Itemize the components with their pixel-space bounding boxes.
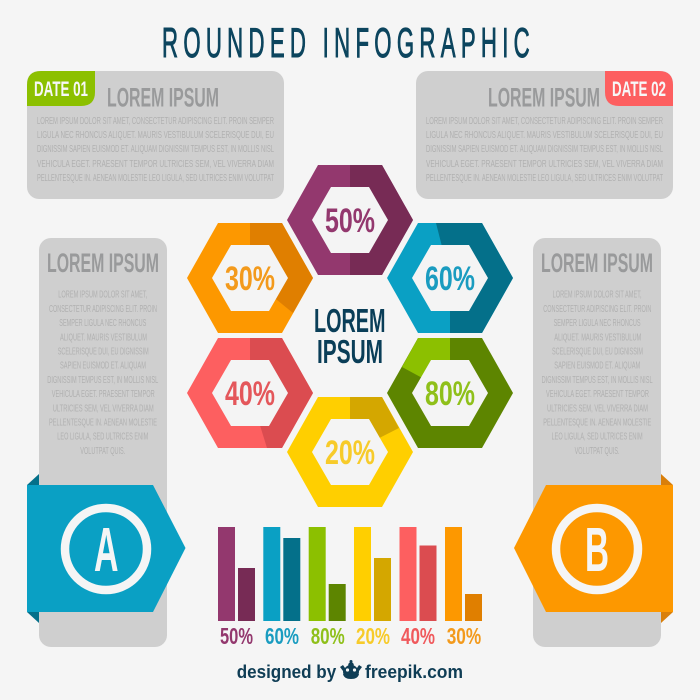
bar labels: 40% bbox=[401, 623, 435, 649]
footer credit bbox=[237, 660, 463, 682]
hexagon: 60% blue: 60% bbox=[425, 260, 475, 298]
text block: CONSECTETUR ADIPISCING ELIT. PROIN bbox=[49, 303, 157, 315]
ribbon badge B: B bbox=[585, 516, 609, 585]
text block: LOREM IPSUM DOLOR SIT AMET, bbox=[58, 289, 147, 301]
hexagon: 80% green: 80% bbox=[425, 375, 475, 413]
text block: PELLENTESQUE IN. AENEAN MOLESTIE bbox=[49, 416, 157, 428]
hexagon: 50% purple bbox=[287, 165, 413, 275]
text block bbox=[37, 115, 274, 184]
date 02 tab bbox=[605, 71, 673, 106]
text block: LEO LIGULA, SED ULTRICES ENIM bbox=[57, 431, 148, 443]
text block: LIGULA NEC RHONCUS ALIQUET. MAURIS VESTIBULUM SCELERISQUE DUI, EU bbox=[37, 129, 274, 141]
center heading: LOREM bbox=[314, 302, 386, 339]
hexagon: 60% blue bbox=[387, 223, 513, 333]
center heading: IPSUM bbox=[317, 333, 383, 370]
text block: VOLUTPAT QUIS. bbox=[80, 445, 125, 457]
text block bbox=[47, 289, 158, 457]
date 02 tab: DATE 02 bbox=[612, 78, 666, 101]
text block: ULTRICIES SEM, VEL VIVERRA DIAM bbox=[53, 402, 154, 414]
text block: PELLENTESQUE IN. AENEAN MOLESTIE LEO LIGULA, SED ULTRICES ENIM VOLUTPAT bbox=[37, 172, 274, 184]
text block bbox=[542, 289, 653, 457]
bar labels bbox=[220, 623, 481, 649]
heading: LOREM IPSUM bbox=[488, 82, 600, 112]
hexagon: 20% yellow bbox=[287, 397, 413, 507]
ribbon badge A bbox=[27, 474, 186, 623]
hexagon: 30% orange: 30% bbox=[225, 260, 275, 298]
bar labels: 30% bbox=[447, 623, 481, 649]
text block: LOREM IPSUM DOLOR SIT AMET, CONSECTETUR ADIPISCING ELIT. PROIN SEMPER bbox=[37, 115, 274, 127]
text block: SAPIEN EUISMOD ET. ALIQUAM bbox=[60, 360, 146, 372]
ribbon badge B bbox=[514, 474, 673, 623]
footer credit: freepik.com bbox=[365, 661, 463, 682]
hexagon: 80% green bbox=[387, 338, 513, 448]
hexagon: 40% red: 40% bbox=[225, 375, 275, 413]
date 01 tab bbox=[27, 71, 95, 106]
bar labels: 80% bbox=[311, 623, 345, 649]
hexagon: 50% purple: 50% bbox=[325, 202, 375, 240]
bar labels: 60% bbox=[265, 623, 299, 649]
text block bbox=[426, 115, 663, 184]
text block: VEHICULA EGET. PRAESENT TEMPOR bbox=[52, 388, 155, 400]
bar labels: 20% bbox=[356, 623, 390, 649]
panel: left column A bbox=[39, 238, 167, 647]
text block: SEMPER LIGULA NEC RHONCUS bbox=[59, 317, 146, 329]
text block: ALIQUET. MAURIS VESTIBULUM bbox=[60, 331, 147, 343]
text block: VOLUTPAT QUIS. bbox=[575, 445, 620, 457]
panel: date 02 bbox=[416, 71, 673, 199]
ribbon badge A: A bbox=[94, 516, 118, 585]
footer credit: designed by bbox=[237, 661, 337, 682]
panel: date 01 bbox=[27, 71, 284, 199]
text block: VEHICULA EGET. PRAESENT TEMPOR ULTRICIES SEM, VEL VIVERRA DIAM bbox=[37, 158, 274, 170]
date 01 tab: DATE 01 bbox=[34, 78, 88, 101]
text block: DIGNISSIM TEMPUS EST, IN MOLLIS NISL bbox=[47, 374, 158, 386]
bar chart bbox=[218, 527, 482, 649]
text block: SCELERISQUE DUI, EU DIGNISSIM bbox=[58, 346, 149, 358]
hexagon: 20% yellow: 20% bbox=[325, 434, 375, 472]
bar labels: 50% bbox=[220, 623, 253, 649]
icon: freepik logo bbox=[340, 660, 362, 679]
text block: DIGNISSIM SAPIEN EUISMOD ET. ALIQUAM DIGNISSIM TEMPUS EST, IN MOLLIS NISL bbox=[37, 143, 274, 155]
hexagon: 30% orange bbox=[187, 223, 313, 333]
panel: right column B bbox=[533, 238, 661, 647]
center heading bbox=[314, 302, 386, 370]
hexagon: 40% red bbox=[187, 338, 313, 448]
heading: LOREM IPSUM bbox=[107, 82, 219, 112]
heading: LOREM IPSUM bbox=[47, 248, 159, 278]
